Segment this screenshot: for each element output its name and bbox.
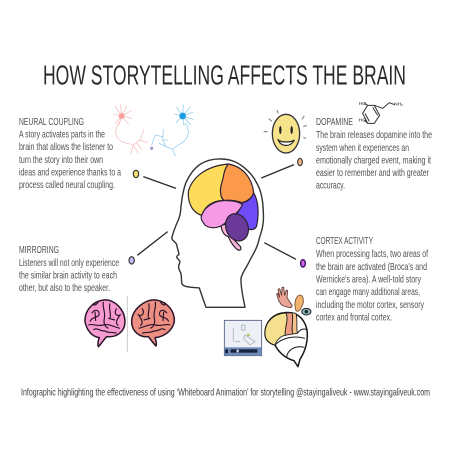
- neuron: blue: [150, 105, 193, 156]
- body: mirroring: Listeners will not only experience: [19, 257, 119, 269]
- icon: smiley sun: [264, 110, 307, 153]
- brain: occipital lobe: [237, 192, 258, 230]
- body: dopamine: accuracy.: [316, 180, 345, 192]
- body: dopamine: [316, 129, 432, 192]
- brain: salmon: [132, 300, 174, 346]
- mirrored brains: [85, 297, 174, 352]
- panel: mirroring text: [19, 244, 119, 294]
- molecule labels: HO: [359, 101, 366, 107]
- smiley mouth: [278, 140, 294, 145]
- head outline: [172, 159, 263, 307]
- sensory strip: [292, 313, 297, 334]
- heading: neural coupling: NEURAL COUPLING: [19, 116, 84, 128]
- central head with brain: [172, 159, 263, 307]
- molecule labels: [359, 101, 403, 123]
- body: neural coupling: process called neural coupling.: [19, 179, 115, 191]
- panel: dopamine text: [316, 116, 432, 192]
- neuron: pink: [113, 105, 147, 154]
- body: cortex activity: [316, 248, 428, 324]
- sensory brain: [265, 312, 307, 367]
- body: cortex activity: cortex and frontal cortex.: [316, 312, 392, 324]
- dot: peach: [298, 158, 302, 166]
- heading: dopamine: DOPAMINE: [316, 116, 353, 128]
- divider: dotted line: [126, 297, 129, 352]
- brain: temporal lobe: [201, 201, 242, 228]
- body: neural coupling: [19, 128, 121, 191]
- dot: lavender: [129, 257, 134, 264]
- connector: mirroring: [137, 232, 168, 255]
- eye: [302, 308, 311, 315]
- connector: dopamine: [261, 165, 294, 178]
- whiteboard video player: [224, 320, 262, 356]
- connector lines and dots: [129, 158, 305, 267]
- body: neural coupling: ideas and experience thanks to a: [19, 166, 121, 178]
- frontal region: [265, 313, 287, 345]
- body: mirroring: the similar brain activity to each: [19, 270, 117, 282]
- body: mirroring: [19, 257, 119, 294]
- hand: [277, 287, 292, 308]
- molecule bonds: [363, 103, 395, 123]
- body: mirroring: other, but also to the speaker.: [19, 282, 110, 294]
- brain: cerebellum: [222, 210, 252, 244]
- body: neural coupling: brain that allows the listener to: [19, 141, 113, 153]
- body: neural coupling: A story activates parts in the: [19, 128, 105, 140]
- ear: [295, 295, 303, 311]
- body: neural coupling: turn the story into their own: [19, 154, 103, 166]
- dot: yellow: [133, 170, 139, 178]
- panel: neural coupling text: [19, 116, 121, 191]
- panel: cortex activity text: [316, 235, 428, 324]
- heading: cortex activity: CORTEX ACTIVITY: [316, 235, 373, 247]
- icon: neurons: [113, 105, 193, 156]
- molecule labels: NH₂: [394, 101, 403, 107]
- brain: pink: [85, 300, 125, 347]
- brain: parietal lobe: [220, 164, 254, 203]
- brain: stem: [221, 224, 241, 250]
- smiley rays: [264, 110, 307, 138]
- smiley eyes: [279, 126, 293, 134]
- heading: mirroring: MIRRORING: [19, 244, 59, 256]
- motor strip: [285, 313, 293, 335]
- smiley face: [272, 114, 300, 153]
- connector: neural coupling: [143, 177, 176, 188]
- connector: cortex activity: [264, 243, 296, 259]
- cortex illustration: [224, 287, 311, 367]
- molecule labels: HO: [359, 117, 366, 123]
- brain: frontal lobe: [188, 164, 228, 215]
- icon: dopamine molecule: [359, 101, 403, 123]
- dot: purple: [301, 260, 305, 267]
